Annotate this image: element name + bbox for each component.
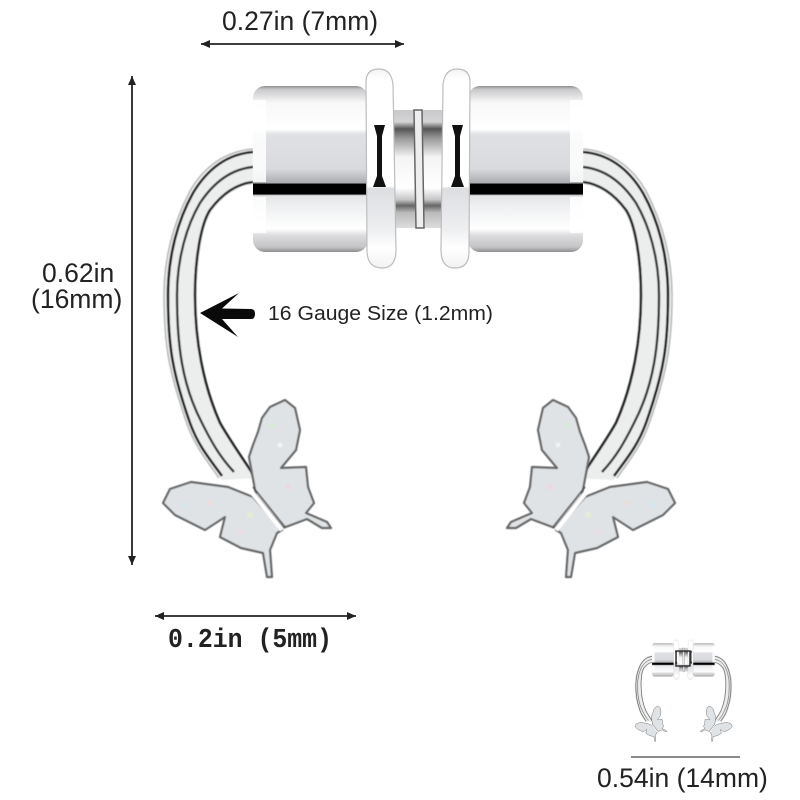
dimension: height: (16mm) — [31, 284, 122, 314]
label: gauge size: 16 Gauge Size (1.2mm) — [268, 303, 493, 325]
dimension: height — [31, 76, 132, 565]
dimension: butterfly width: 0.2in (5mm) — [168, 626, 332, 656]
dimension: height: 0.62in — [42, 258, 114, 288]
dimension: overall width: 0.54in (14mm) — [597, 763, 768, 793]
arrow: gauge pointer — [200, 293, 255, 337]
main product illustration — [163, 69, 675, 577]
small size reference illustration — [635, 640, 732, 741]
dimension: top width: 0.27in (7mm) — [222, 6, 378, 36]
